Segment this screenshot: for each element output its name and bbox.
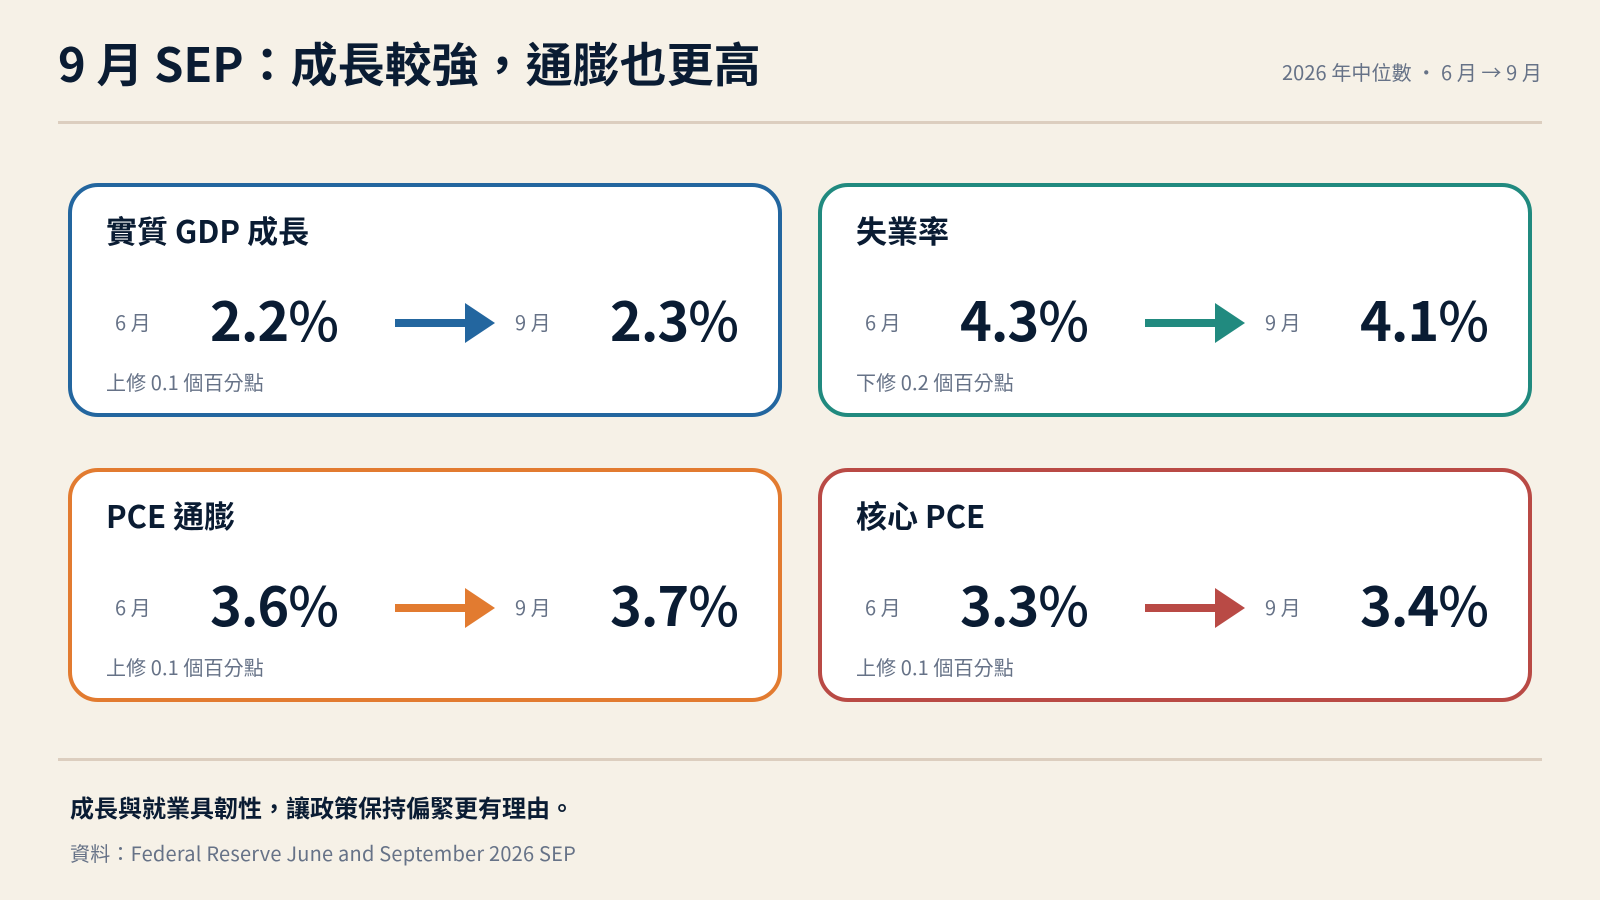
revision note: 上修 0.1 個百分點 [106, 652, 264, 681]
June label: 6 月 [865, 592, 901, 621]
September value: 2.3% [610, 278, 738, 357]
heading: 核心 PCE [856, 492, 985, 537]
arrow [1145, 588, 1245, 628]
June value: 4.3% [960, 278, 1088, 357]
panel: unemployment [818, 183, 1532, 417]
heading: 失業率 [856, 207, 949, 252]
title: 9 月 SEP：成長較強，通膨也更高 [58, 27, 761, 96]
arrow [395, 303, 495, 343]
heading: PCE 通膨 [106, 492, 235, 537]
panel: PCE inflation [68, 468, 782, 702]
takeaway text: 成長與就業具韌性，讓政策保持偏緊更有理由。 [70, 789, 574, 824]
September value: 3.4% [1360, 563, 1488, 642]
June label: 6 月 [115, 307, 151, 336]
heading: 實質 GDP 成長 [106, 207, 309, 252]
panel: real GDP growth [68, 183, 782, 417]
June label: 6 月 [115, 592, 151, 621]
arrow [395, 588, 495, 628]
revision note: 下修 0.2 個百分點 [856, 367, 1014, 396]
September value: 3.7% [610, 563, 738, 642]
revision note: 上修 0.1 個百分點 [856, 652, 1014, 681]
June value: 2.2% [210, 278, 338, 357]
June value: 3.6% [210, 563, 338, 642]
subtitle: 2026 年中位數 ・ 6 月 → 9 月 [1282, 57, 1542, 86]
source: 資料：Federal Reserve June and September 2026 SEP [70, 838, 576, 867]
arrow [1145, 303, 1245, 343]
June label: 6 月 [865, 307, 901, 336]
revision note: 上修 0.1 個百分點 [106, 367, 264, 396]
panel: core PCE [818, 468, 1532, 702]
September label: 9 月 [515, 307, 551, 336]
June value: 3.3% [960, 563, 1088, 642]
September label: 9 月 [515, 592, 551, 621]
September value: 4.1% [1360, 278, 1488, 357]
September label: 9 月 [1265, 592, 1301, 621]
September label: 9 月 [1265, 307, 1301, 336]
